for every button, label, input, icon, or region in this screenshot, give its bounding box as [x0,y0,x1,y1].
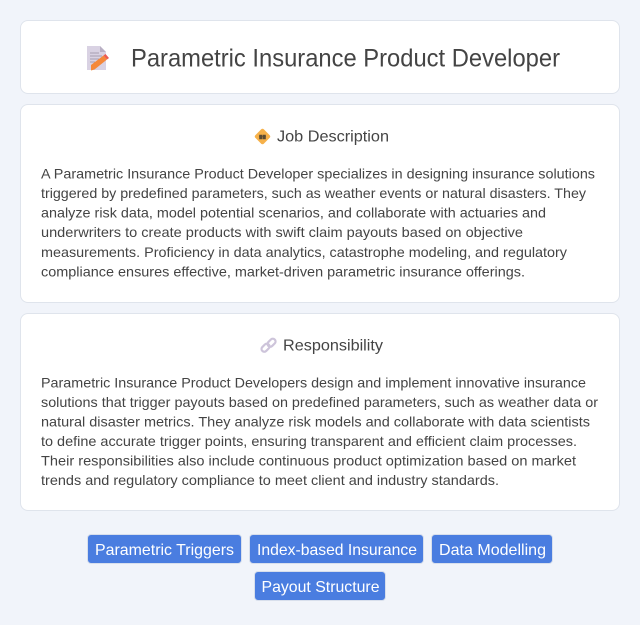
text: responsibility body: trends and regulatory compliance to meet client and industry standards. [41,472,499,488]
heading: job description: Job Description [277,128,389,146]
tag: Index-based Insurance [249,534,424,564]
tag: Parametric Triggers [87,534,242,564]
text: responsibility body [41,374,598,488]
text: job description body: underwriters to create products with swift claim payouts based on objective [41,224,523,240]
title: Parametric Insurance Product Developer [131,44,560,72]
text: responsibility body: Their responsibilities also include continuous product optimization based on market [41,452,576,468]
text: responsibility body: to define accurate trigger points, ensuring transparent and efficient claim processes. [41,433,577,449]
tag: Data Modelling: Data Modelling [439,542,546,559]
text: job description body: analyze risk data, model potential scenarios, and collaborate with actuaries and [41,204,546,220]
text: job description body: measurements. Proficiency in data analytics, catastrophe modeling, and regulatory [41,244,567,260]
text: responsibility body: Parametric Insurance Product Developers design and implement innovative insurance [41,374,586,390]
text: responsibility body: solutions that trigger payouts based on predefined parameters, such as weather data or [41,394,598,410]
text: responsibility body: natural disaster metrics. They analyze risk models and collaborate with data scientists [41,414,590,430]
tag: Data Modelling [431,534,553,564]
tag: Parametric Triggers: Parametric Triggers [95,542,234,559]
tag: Index-based Insurance: Index-based Insurance [257,542,417,559]
panel: job description [20,104,620,303]
heading: responsibility: Responsibility [283,338,383,354]
panel: title card [20,20,620,94]
tag: Payout Structure: Payout Structure [262,579,380,596]
text: job description body: A Parametric Insurance Product Developer specializes in designing insurance solutions [41,166,595,182]
icon: chain link [260,338,277,353]
icon: job diamond [254,128,270,144]
panel: responsibility [20,313,620,511]
text: job description body: compliance ensures effective, market-driven parametric insurance offerings. [41,264,525,280]
icon: document with pencil [87,46,109,70]
text: job description body [41,166,595,280]
text: job description body: triggered by predefined parameters, such as weather events or natural disasters. They [41,185,586,201]
tag: Payout Structure [254,571,386,601]
